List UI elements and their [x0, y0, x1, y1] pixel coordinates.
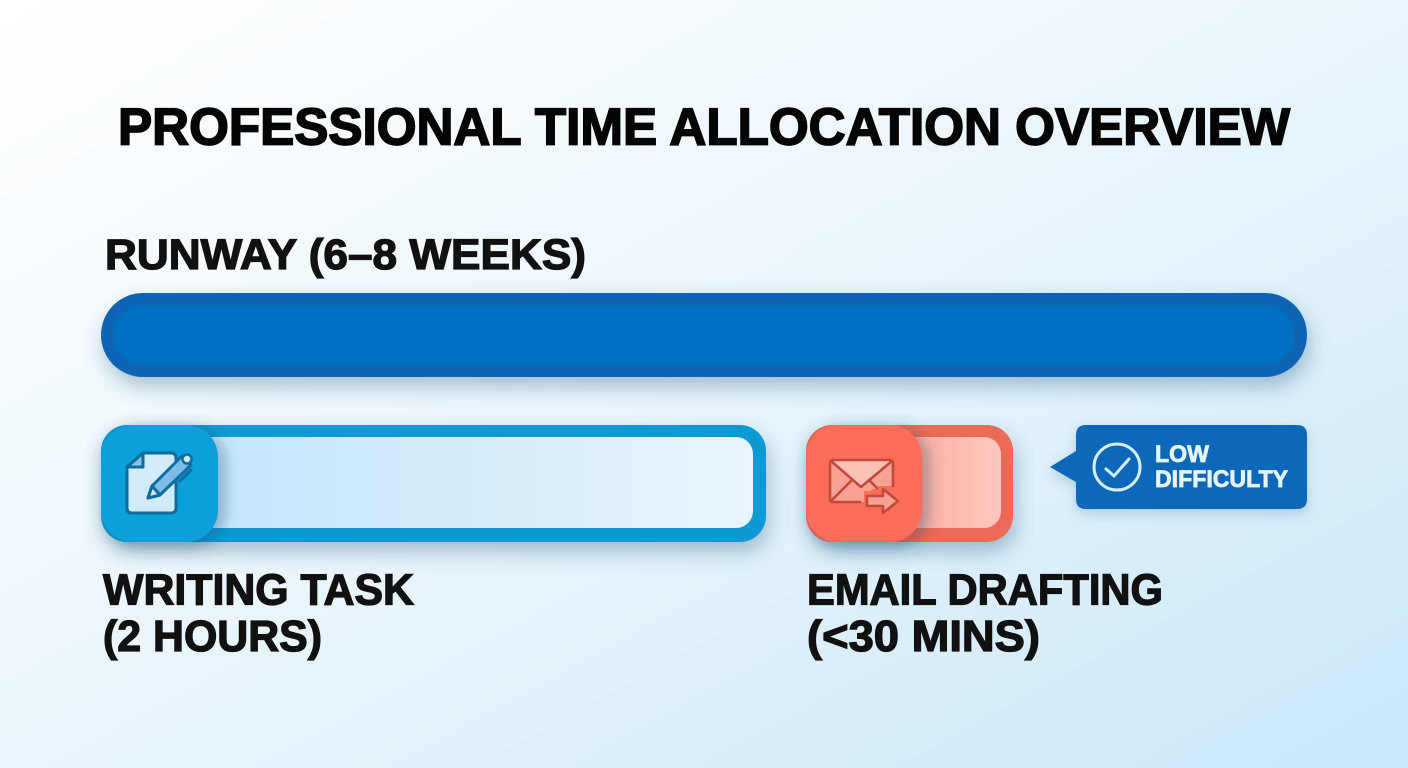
bar: email drafting [806, 425, 1013, 542]
callout text: DIFFICULTY [1155, 466, 1288, 493]
callout text [1155, 441, 1288, 493]
icon: check circle [1094, 444, 1140, 490]
callout text: LOW [1155, 441, 1209, 468]
heading: runway: RUNWAY (6–8 WEEKS) [105, 231, 586, 279]
icon: document and pen [101, 425, 218, 542]
label: writing task: WRITING TASK [103, 566, 414, 614]
label: email drafting [807, 566, 1163, 661]
label: email drafting: EMAIL DRAFTING [807, 566, 1163, 614]
bar: writing task [101, 425, 766, 542]
callout: low difficulty [1050, 425, 1307, 509]
title: PROFESSIONAL TIME ALLOCATION OVERVIEW [118, 98, 1291, 156]
label: writing task [103, 566, 414, 661]
icon: envelope with arrow [806, 425, 922, 542]
bar: runway [101, 293, 1307, 377]
label: email drafting: (<30 MINS) [807, 612, 1040, 661]
label: writing task: (2 HOURS) [103, 612, 322, 661]
